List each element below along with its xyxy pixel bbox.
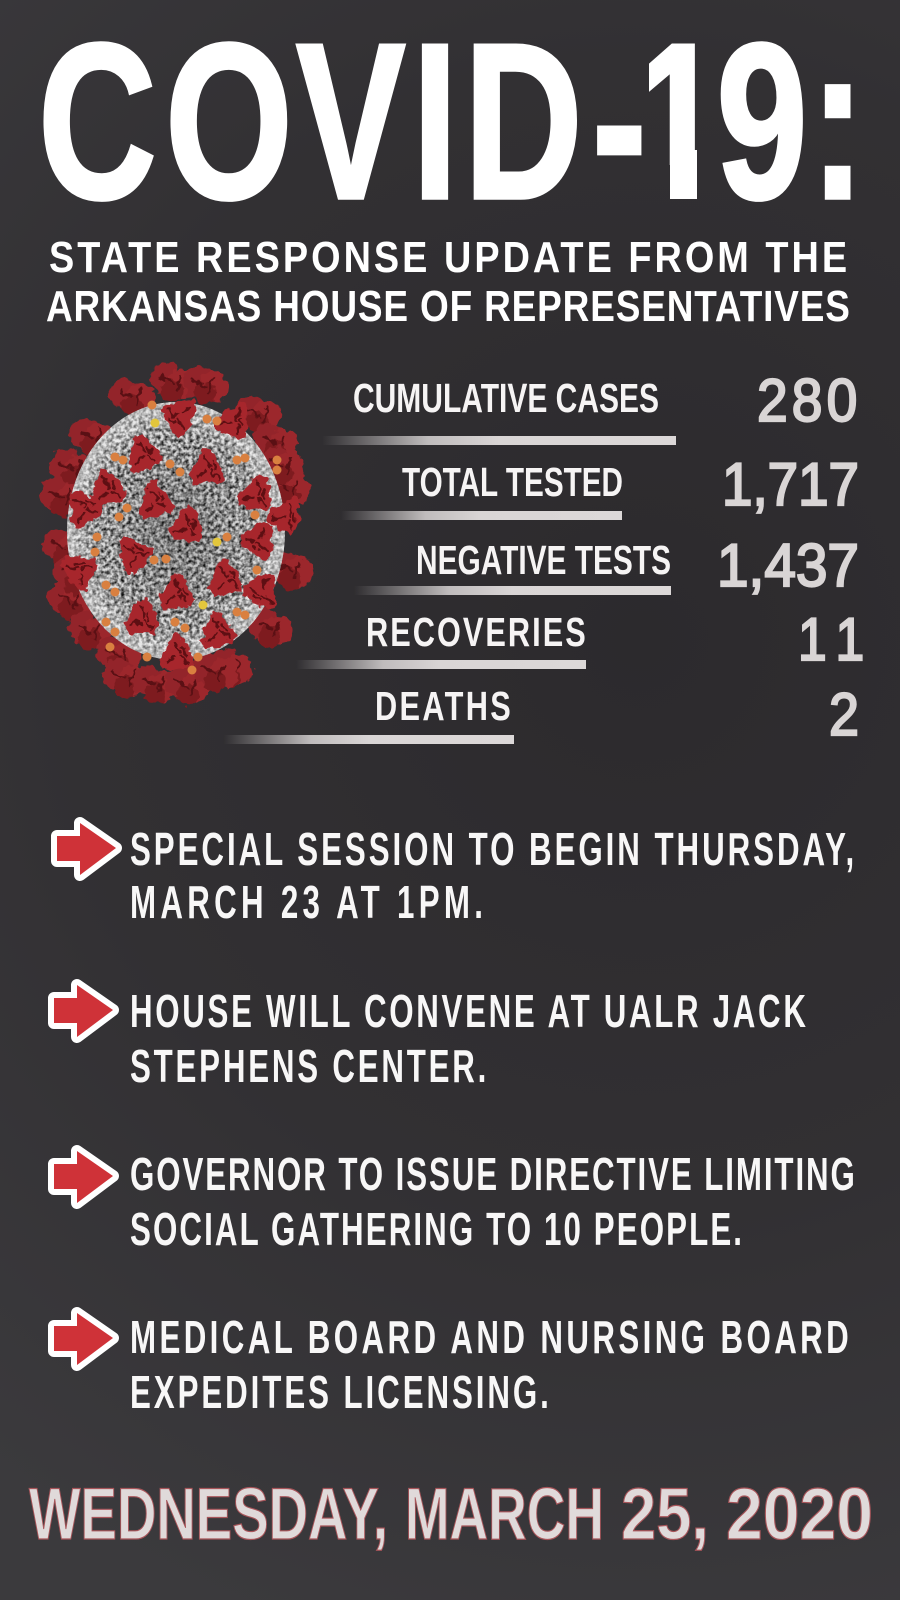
footer date: MARCH	[405, 1474, 604, 1555]
bullet: governor directive: SOCIAL GATHERING TO 10 PEOPLE.	[130, 1204, 742, 1256]
bullet: house convene: HOUSE WILL CONVENE AT UALR JACK	[130, 986, 806, 1038]
bullet: special session	[57, 823, 854, 929]
title: COVID-	[38, 0, 647, 246]
stat: cumulative cases: 280	[757, 368, 857, 435]
stat: cumulative cases	[322, 368, 857, 445]
subtitle	[46, 232, 850, 331]
icon: red arrow	[57, 823, 116, 875]
bullet: house convene	[54, 985, 806, 1093]
stat: negative tests: NEGATIVE TESTS	[416, 537, 671, 583]
bullet: governor directive	[54, 1149, 855, 1256]
bullet: governor directive: GOVERNOR TO ISSUE DIRECTIVE LIMITING	[130, 1149, 855, 1201]
bullet: special session: MARCH 23 AT 1PM.	[130, 877, 483, 929]
icon: red arrow	[54, 1313, 113, 1365]
stat: recoveries: 11	[798, 605, 864, 673]
title	[43, 41, 850, 202]
stat: deaths: DEATHS	[375, 683, 511, 729]
stat: deaths	[224, 681, 859, 748]
icon: coronavirus illustration	[40, 363, 313, 706]
stat: total tested: TOTAL TESTED	[402, 459, 623, 505]
title: 9:	[716, 0, 865, 246]
stat: cumulative cases: CUMULATIVE CASES	[353, 375, 659, 421]
stat: deaths: 2	[829, 681, 859, 748]
stat: negative tests	[354, 532, 859, 599]
bullet: house convene: STEPHENS CENTER.	[130, 1041, 486, 1093]
title: 1	[633, 0, 724, 246]
bullet: special session: SPECIAL SESSION TO BEGIN THURSDAY,	[130, 824, 854, 876]
footer date: WEDNESDAY,	[29, 1474, 388, 1555]
footer date	[29, 1474, 873, 1555]
stat: total tested	[341, 451, 859, 520]
bullet: licensing	[54, 1312, 849, 1419]
stat: recoveries: RECOVERIES	[366, 609, 586, 655]
stat: recoveries	[296, 605, 864, 673]
subtitle: STATE RESPONSE UPDATE FROM THE	[49, 232, 847, 282]
icon: red arrow	[54, 1151, 113, 1203]
subtitle: ARKANSAS HOUSE OF REPRESENTATIVES	[46, 281, 850, 331]
bullet: licensing: MEDICAL BOARD AND NURSING BOARD	[130, 1312, 849, 1364]
stat: total tested: 1,717	[722, 451, 859, 518]
stat: negative tests: 1,437	[717, 532, 859, 599]
bullet: licensing: EXPEDITES LICENSING.	[130, 1367, 549, 1419]
footer date: 2020	[726, 1474, 873, 1555]
footer date: 25,	[621, 1474, 709, 1555]
icon: red arrow	[54, 985, 113, 1037]
